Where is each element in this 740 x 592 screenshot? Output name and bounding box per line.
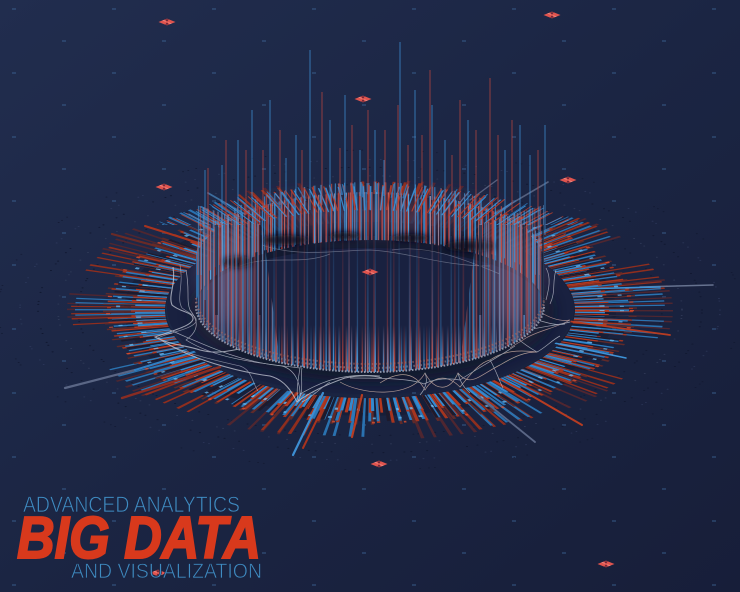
cylinder shadow xyxy=(190,242,554,382)
faint interior contours xyxy=(240,245,500,274)
base dots along the front edge xyxy=(196,298,544,372)
back wall upper bars xyxy=(197,182,540,275)
outlier spokes xyxy=(65,180,713,455)
back wall bars xyxy=(196,192,540,304)
shadow patches at the wall foot xyxy=(222,232,496,268)
title: advanced analytics: ADVANCED ANALYTICS xyxy=(23,492,240,517)
dark floor gap between spokes and cylinder xyxy=(167,222,573,394)
tall data spikes xyxy=(205,42,545,300)
cylinder interior floor xyxy=(196,240,544,372)
side wall haze xyxy=(204,202,536,335)
dense side wall bars xyxy=(190,270,550,280)
title: and visualization: AND VISUALIZATION xyxy=(71,560,262,583)
rear radial spokes over the back wall xyxy=(156,184,582,225)
flow contour lines xyxy=(155,265,570,402)
scattered data points around the ring xyxy=(0,150,740,470)
radial spokes chart xyxy=(108,197,632,423)
front wall bars xyxy=(190,304,550,350)
back wall dark underlay xyxy=(196,194,544,306)
red diamond markers xyxy=(150,12,614,576)
title: big data: BIG DATA xyxy=(17,505,261,571)
